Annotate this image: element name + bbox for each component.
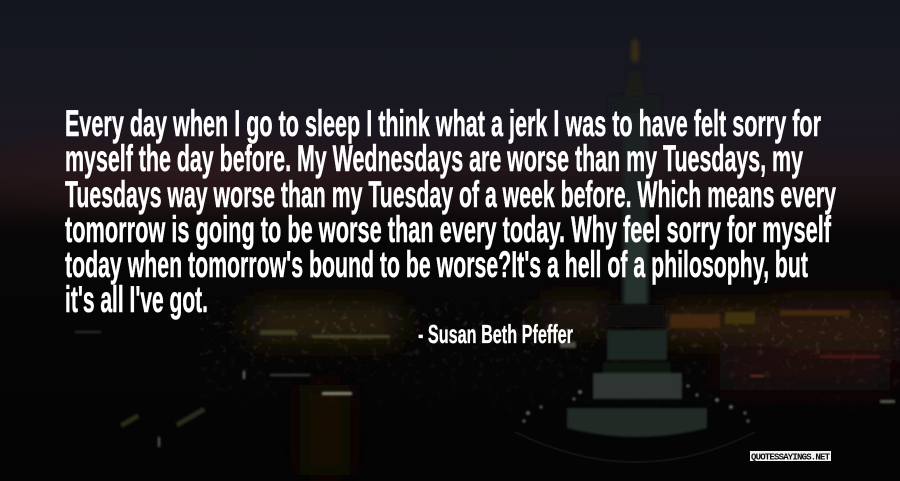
author attribution: - Susan Beth Pfeffer <box>418 319 573 349</box>
background: city lights <box>75 290 900 475</box>
quote text: it's all I've got. <box>65 279 208 320</box>
logo: site watermark: QUOTESSAYINGS.NET <box>751 452 831 462</box>
quote text <box>65 103 836 320</box>
illustration: monument column <box>515 40 755 462</box>
